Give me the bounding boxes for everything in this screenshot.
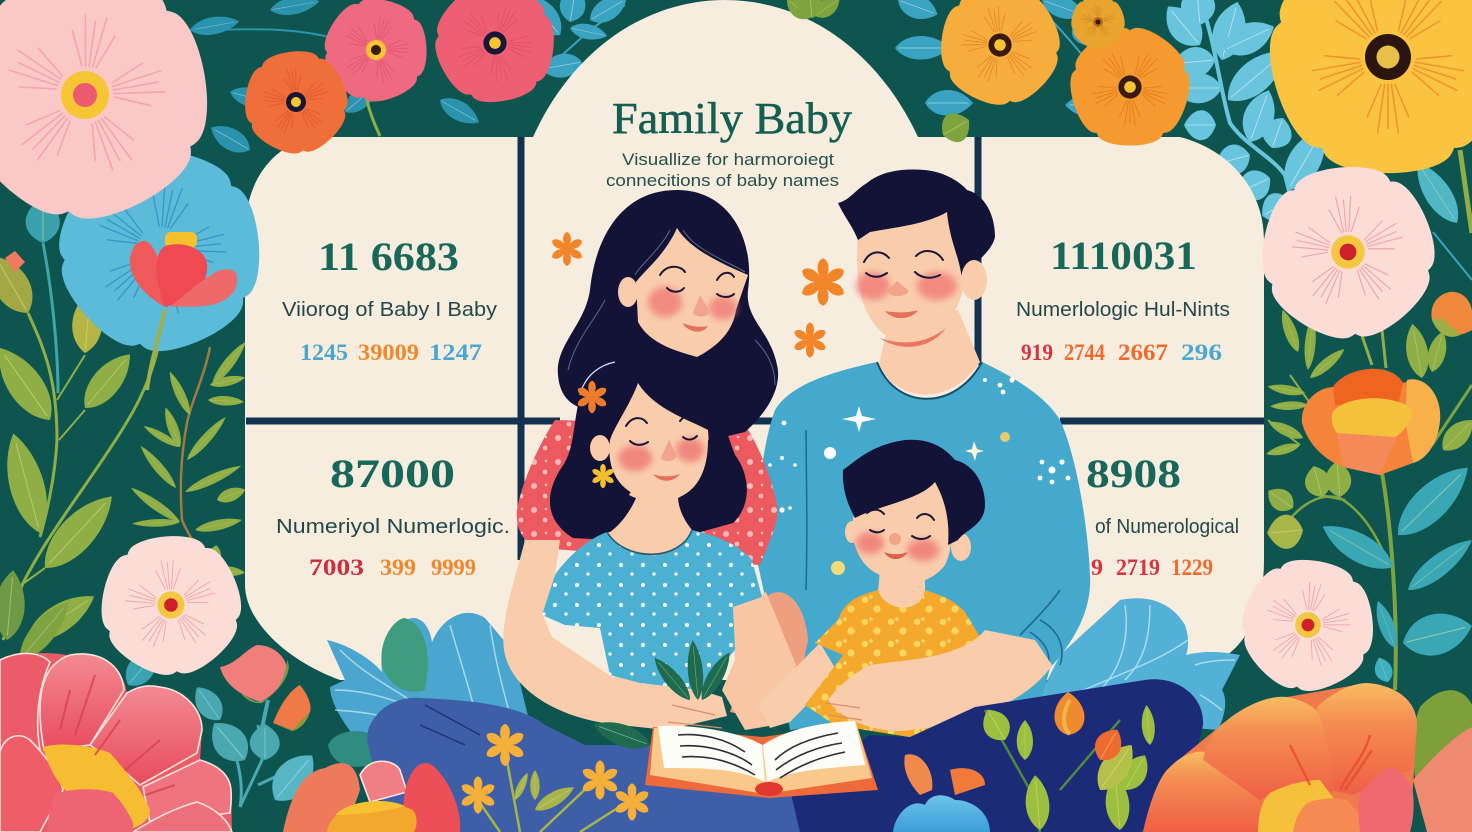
father's ear: [961, 260, 987, 300]
headline number: 87000: [330, 451, 455, 496]
panel dividers: [246, 137, 1264, 560]
panel: cream arched board: [245, 0, 1264, 680]
stat numbers: 9999: [431, 555, 476, 580]
panel: stat top right: [1016, 233, 1230, 365]
father's hair: [838, 170, 995, 285]
flower: orange top left: [232, 44, 361, 167]
foreground plants: bottom centre yellow flowers: [460, 724, 650, 832]
mother's arm: [503, 540, 727, 730]
foliage: large blue leaves behind family, right: [1035, 598, 1240, 730]
foliage: top left sprigs: [188, 0, 484, 159]
icon: orange tulip on trousers: [1054, 692, 1084, 735]
figure: girl: [550, 343, 747, 554]
icon: orange blooms on trousers: [904, 754, 985, 795]
stat numbers: 399: [380, 555, 416, 580]
boy's arm: [758, 643, 838, 728]
flower: big coral bottom left: [0, 653, 232, 832]
foliage: top right blue fern: [1156, 0, 1337, 229]
icon: orange blossoms on the panel: [550, 232, 846, 358]
girl's dress: [542, 530, 762, 690]
icon: small red tulips lower left: [220, 645, 311, 731]
foliage: lower left sprigs and buds: [11, 595, 325, 811]
stat numbers: [309, 555, 476, 580]
flower: small gold top: [1068, 0, 1128, 52]
title: Family Baby: [612, 94, 852, 143]
stat numbers: 1245: [300, 340, 348, 365]
stat label: Viiorog of Baby I Baby: [282, 299, 497, 321]
flower: coral top centre: [407, 0, 580, 132]
stat numbers: 2719: [1116, 555, 1160, 580]
girl's hair: [550, 343, 747, 540]
figure: family group: [367, 170, 1203, 832]
foliage: right column stems and leaves: [1262, 150, 1472, 778]
father's left forearm: [730, 592, 808, 720]
foliage: top centre teal sprigs: [517, 0, 1125, 122]
panel: stat bottom right: [1086, 451, 1239, 580]
boy's face: [852, 480, 951, 584]
headline number: 11 6683: [318, 234, 459, 279]
flower: big yellow top right: [1203, 0, 1472, 242]
icon: lower plant: [590, 715, 654, 755]
flower: coral bottom: [283, 761, 460, 832]
mother's ear: [618, 277, 638, 307]
figure: mother: [517, 190, 778, 565]
stat label: of Numerological: [1095, 516, 1239, 538]
mother's features: [648, 267, 737, 332]
girl's features: [618, 416, 704, 481]
father's face: [857, 210, 965, 343]
foliage: left column vines: [0, 198, 250, 651]
father's right forearm around boy: [828, 630, 1052, 731]
open book: [645, 721, 878, 798]
girl's arm: [722, 592, 796, 730]
figure: father: [757, 170, 1090, 730]
father's sweater: [757, 362, 1090, 730]
boy's features: [856, 510, 939, 561]
stat numbers: 919: [1021, 340, 1053, 365]
boy's ear: [951, 533, 971, 561]
boy's shirt: [805, 590, 980, 738]
girl's face: [609, 383, 709, 500]
father's features: [856, 251, 957, 318]
subtitle: Visuallize for harmoroiegt: [622, 150, 834, 169]
stat numbers: [1091, 555, 1213, 580]
icon: plant in girl's lap: [649, 640, 736, 705]
headline number: 8908: [1086, 451, 1181, 496]
figure: father's navy trousers: [790, 679, 1203, 832]
mother's floral dress: [517, 420, 778, 565]
panel: stat top left: [282, 234, 497, 365]
flower: amber top middle: [925, 0, 1077, 123]
icon: orange bud right: [1431, 292, 1472, 337]
subtitle: connecitions of baby names: [606, 171, 839, 190]
stat label: Numeriyol Numerlogic.: [276, 516, 510, 538]
headline number: 1110031: [1050, 233, 1197, 278]
flower: blue bloom bottom centre: [893, 795, 990, 832]
girl's neck: [607, 490, 692, 554]
panel: stat bottom left: [276, 451, 510, 580]
figure: mother's blue trousers: [367, 698, 805, 832]
icon: hair flower orange: [576, 381, 608, 413]
stat numbers: [1021, 340, 1222, 365]
stat numbers: 2744: [1064, 340, 1105, 365]
stat numbers: 9: [1091, 555, 1103, 580]
stat numbers: [300, 340, 482, 365]
foliage: green sprig over the arch: [781, 0, 976, 148]
boy's hair: [843, 440, 985, 545]
foliage: large blue leaves behind family, left: [327, 613, 535, 767]
foreground plants: bottom right green sprigs: [976, 703, 1156, 832]
flower: big pink top left: [0, 0, 238, 252]
stat label: Numerlologic Hul-Nints: [1016, 299, 1230, 321]
flower: pale pink lower right: [1223, 549, 1391, 711]
stat numbers: 7003: [309, 555, 364, 580]
girl's ear: [590, 435, 610, 461]
figure: arms: [503, 540, 808, 730]
flower: red tulip: [130, 232, 237, 390]
boy's neck: [878, 565, 925, 609]
mother's face: [636, 228, 748, 357]
stat numbers: 2667: [1118, 340, 1168, 365]
flower: coral top: [306, 0, 444, 121]
flower: pale pink lower left: [88, 530, 255, 690]
icon: hair flower yellow: [591, 464, 615, 488]
stat numbers: 1229: [1171, 555, 1213, 580]
flower: orange tulip right: [1302, 369, 1440, 475]
hands: [668, 703, 862, 728]
mother's hair: [558, 190, 778, 445]
stat numbers: 39009: [358, 340, 419, 365]
flower: blue large left: [27, 130, 290, 385]
flower: orange top right: [1037, 1, 1218, 180]
flower: pale pink right: [1245, 159, 1452, 358]
stat numbers: 1247: [429, 340, 482, 365]
title block: [606, 94, 852, 190]
sweater sparkles: [768, 377, 1070, 575]
figure: boy: [758, 440, 985, 738]
flower: big orange bottom right: [1143, 683, 1472, 832]
girl's hair lobes: [550, 440, 747, 538]
stat numbers: 296: [1181, 340, 1222, 365]
father's neck: [879, 310, 980, 395]
subtitle: [606, 150, 839, 190]
boy's left ear: [845, 521, 859, 543]
